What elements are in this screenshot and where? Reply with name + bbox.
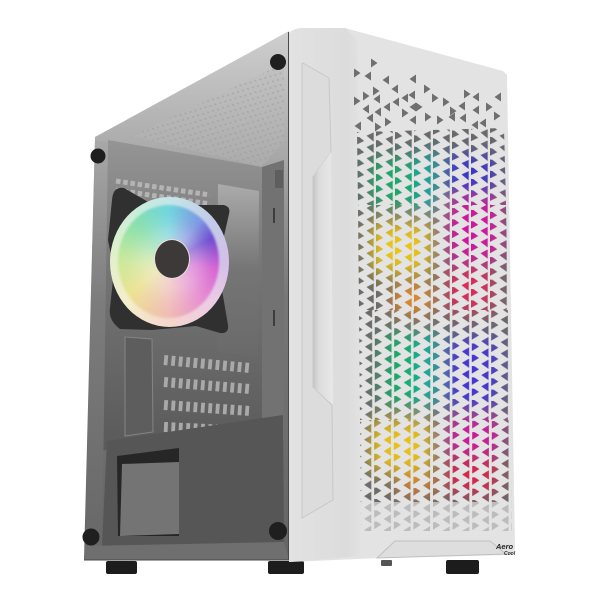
- fan assembly: [105, 188, 235, 333]
- glass edge shadow: [84, 32, 288, 560]
- mesh base: [357, 128, 512, 502]
- left glass frame: [85, 140, 108, 546]
- channel highlight: [313, 152, 333, 405]
- side strip: [289, 28, 361, 562]
- motherboard bracket: [125, 337, 153, 436]
- recessed channel: [302, 63, 333, 518]
- right interior column: [262, 160, 284, 440]
- rainbow ring: [105, 192, 235, 332]
- blade glow: [137, 226, 205, 298]
- glass panel screws: [82, 54, 287, 546]
- cable slots: [273, 170, 283, 326]
- PSU body: [120, 462, 179, 536]
- expansion slots: [164, 360, 250, 431]
- front RGB mesh: [357, 128, 512, 531]
- case front body: [289, 28, 515, 562]
- bottom chamfer: [377, 541, 506, 558]
- unlit lower mesh: [360, 502, 512, 531]
- rear vent holes: [116, 181, 210, 204]
- brand logo: [495, 542, 516, 557]
- fan blades: [118, 205, 219, 318]
- PSU cutout: [117, 448, 179, 536]
- pale rear plate: [217, 184, 259, 356]
- hub: [155, 240, 189, 278]
- interior rear wall: [102, 140, 262, 450]
- RGB glow: [370, 152, 502, 494]
- glass bottom strip: [84, 542, 289, 560]
- ceiling mesh: [133, 63, 284, 167]
- feet: [106, 560, 479, 574]
- fan frame: [108, 188, 229, 333]
- PSU shroud: [84, 415, 289, 560]
- sparse top mesh triangles: [354, 58, 501, 132]
- brand logo: Cool: [504, 551, 516, 557]
- glass side panel: [84, 31, 289, 560]
- brand logo: Aero: [495, 542, 514, 551]
- PCIe and interior lower details: [125, 337, 250, 436]
